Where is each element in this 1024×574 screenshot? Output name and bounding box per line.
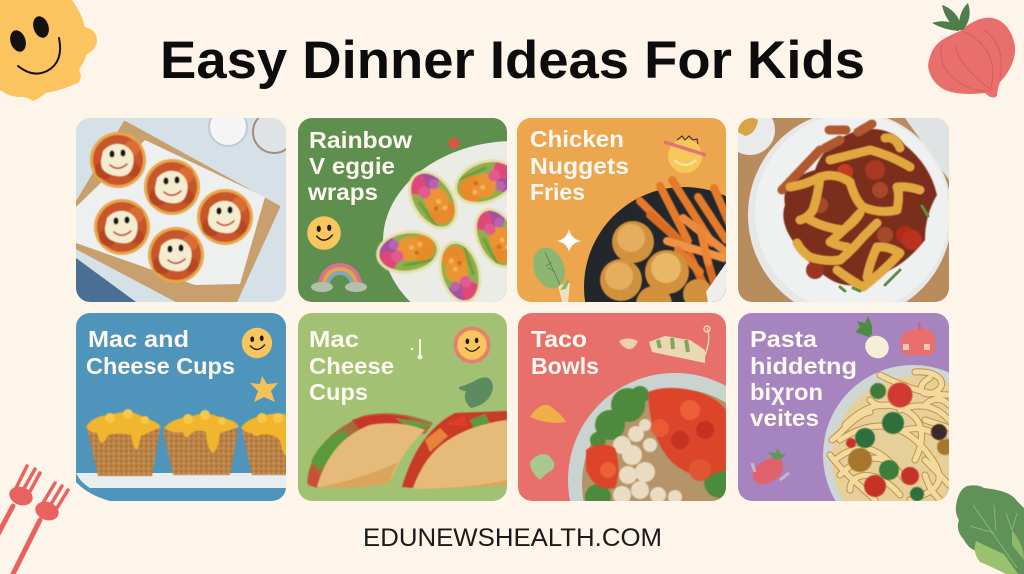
icon: smiling yellow blob <box>0 0 97 101</box>
card heading: Rainbow <box>309 127 412 153</box>
star <box>250 376 278 402</box>
rainbow <box>311 265 367 292</box>
wraps <box>376 158 507 302</box>
card heading: Fries <box>530 179 585 205</box>
white plate <box>748 118 949 302</box>
panel: taco bowls <box>518 313 782 574</box>
card heading <box>307 127 412 205</box>
smiley <box>242 328 272 358</box>
taco one <box>307 413 433 488</box>
bowl <box>823 365 1003 545</box>
card heading: Mac <box>309 326 359 352</box>
panel: mac and cheese cups <box>76 313 292 501</box>
smiley <box>307 216 341 250</box>
card heading: Cheese Cups <box>86 353 235 379</box>
fries <box>640 180 730 290</box>
food icons <box>530 326 710 480</box>
card heading: V eggie <box>309 153 395 179</box>
card heading: Cups <box>309 379 368 405</box>
panel: loaded plate <box>738 118 949 302</box>
leaf <box>459 377 493 408</box>
saucy food <box>782 124 937 285</box>
card heading <box>531 326 599 379</box>
icon: bowl <box>664 136 706 173</box>
card heading: hiddetng <box>750 353 857 379</box>
panel: rainbow veggie wraps <box>298 118 507 302</box>
card heading <box>86 326 235 379</box>
card heading: Pasta <box>750 326 817 352</box>
card heading: Mac and <box>88 326 189 352</box>
pizza faces <box>90 132 253 283</box>
food icons <box>752 316 936 484</box>
napkin <box>706 263 726 302</box>
side bowl <box>738 118 775 155</box>
cups <box>87 428 292 476</box>
card heading: Nuggets <box>530 153 629 179</box>
cherry <box>448 138 460 148</box>
card heading: Bowls <box>531 353 599 379</box>
smiley with ring <box>454 326 490 364</box>
card heading <box>531 130 628 200</box>
panel: mini pizzas <box>76 108 295 302</box>
toppings <box>846 382 953 501</box>
taco two <box>402 411 507 490</box>
card heading <box>750 326 857 431</box>
blue cloth <box>76 258 136 302</box>
nuggets <box>599 220 710 302</box>
white shelf <box>76 473 286 488</box>
cauliflower <box>613 419 682 504</box>
card heading: Chicken <box>530 126 624 152</box>
icon: red forks <box>0 466 68 574</box>
icon: spinach leaf <box>956 485 1024 574</box>
footer website: EDUNEWSHEALTH.COM <box>363 524 662 552</box>
panel: chicken nuggets fries <box>517 118 726 302</box>
card heading: veites <box>750 405 819 431</box>
dark plate <box>584 187 726 302</box>
melted cheese <box>86 409 290 458</box>
plate <box>383 141 507 302</box>
icon: red onion <box>928 3 1015 97</box>
greens <box>585 386 736 510</box>
panel: mac cheese cups tacos <box>298 313 507 501</box>
ramekins <box>208 118 286 154</box>
panel: pasta hidden veggies <box>738 313 1003 545</box>
sparkle <box>557 229 581 252</box>
card heading <box>309 326 394 405</box>
tomatoes <box>586 388 726 489</box>
wooden board <box>76 123 278 302</box>
card heading: wraps <box>307 179 378 205</box>
herbs <box>840 206 928 291</box>
card heading: Cheese <box>309 353 394 379</box>
parchment paper <box>76 140 265 285</box>
card heading: biχron <box>750 379 823 405</box>
card heading: Taco <box>531 326 587 352</box>
cheese drizzle <box>790 138 920 287</box>
leaf <box>533 248 570 302</box>
title: Easy Dinner Ideas For Kids <box>160 31 865 90</box>
sparkle <box>411 339 422 360</box>
pasta <box>830 372 949 500</box>
bowl <box>568 373 782 574</box>
